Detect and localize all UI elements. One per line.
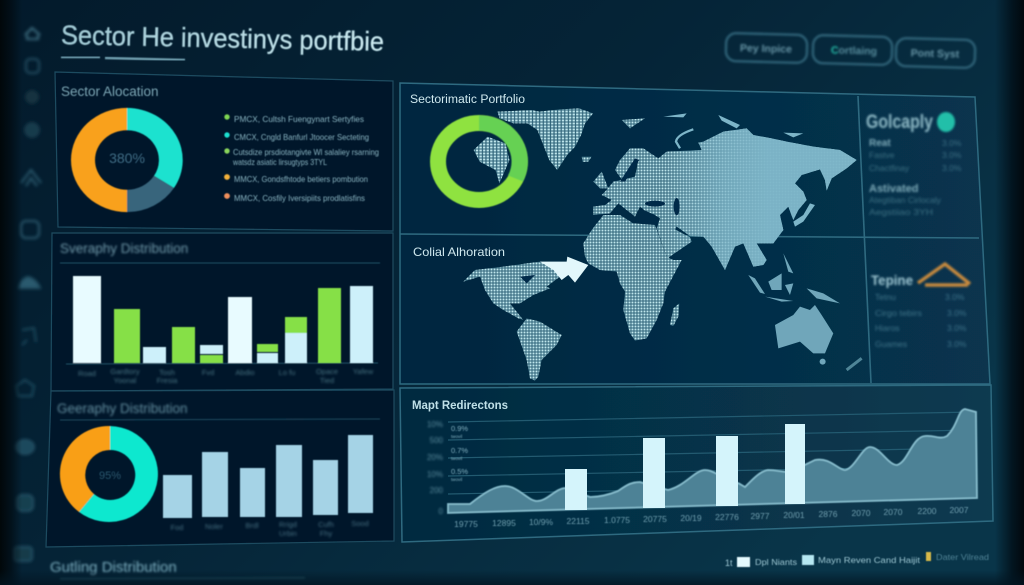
legend item 3 [224, 148, 379, 167]
axis labels: Yoonal [114, 376, 137, 385]
x axis labels: 20775 [643, 514, 667, 524]
heading: Mapt Redirectons [412, 398, 508, 412]
side panel: globally: Fastve [869, 150, 895, 160]
side panel: globally: Golcaply [866, 112, 933, 133]
bars [60, 263, 380, 364]
x axis labels: 22776 [715, 512, 739, 522]
side panel: topline: 3.0% [947, 323, 967, 333]
x axis labels: 10/9% [529, 517, 553, 527]
annotations: 0.7% [451, 446, 468, 455]
panel dividers [400, 96, 979, 383]
axis labels: Fresia [157, 376, 178, 385]
legend item 3: watsdz asiatic lirsugtyps 3TYL [232, 158, 327, 167]
side panel: globally: 3.0% [942, 138, 962, 148]
axis labels: Yafew [353, 367, 374, 376]
side panel: topline [871, 264, 970, 349]
legend item 3: Cutsdize prsdiotangivte Wl salaliey rsarning [233, 148, 379, 157]
icon: cloud [19, 277, 40, 288]
side panel: globally: Aegstiiao 3YH [869, 207, 933, 217]
map: africa [583, 215, 682, 341]
annotations: twovil [451, 456, 462, 461]
title underline [61, 57, 185, 60]
button: pay [726, 33, 807, 63]
heading: collal allocation: Colial Alhoration [413, 245, 505, 259]
x axis labels: 2876 [819, 509, 838, 519]
axis labels: Tied [320, 376, 334, 385]
map: arrow [540, 257, 588, 283]
axis labels: Noler [205, 522, 223, 531]
side panel: topline: Hiaros [875, 323, 900, 333]
footer legend: Mayn Reven Cand Haijit [818, 555, 921, 565]
axis labels: Urbin [279, 529, 297, 538]
map: greenland and islands [474, 108, 593, 183]
x axis labels: 19775 [454, 519, 478, 529]
map: uk [593, 172, 608, 188]
header buttons [726, 33, 975, 68]
axis labels: Brdl [245, 521, 259, 530]
y axis labels: 10% [427, 470, 443, 479]
icon: cloud two [16, 440, 34, 454]
footer legend [725, 552, 989, 568]
icon: profile [26, 59, 39, 73]
annotations [451, 424, 468, 482]
legend item 2: CMCX, Cngld Banfurl Jtoocer Secteting [234, 133, 369, 142]
y axis labels: 10% [427, 420, 443, 429]
side panel: topline: 3.0% [947, 308, 967, 318]
map: eurasia [582, 113, 857, 270]
icon: globe [25, 123, 39, 137]
icon: screen [21, 221, 39, 238]
map: madagascar [670, 303, 679, 326]
y axis labels: 0 [439, 507, 444, 516]
side panel: globally: Chactfinay [869, 163, 910, 173]
area series [448, 409, 977, 513]
icon: hexagon [16, 380, 34, 396]
map: pointer [847, 358, 862, 370]
status dot [937, 112, 955, 132]
y axis labels: 20% [427, 453, 443, 462]
map: svalbard [622, 118, 645, 128]
axis labels: Sood [351, 519, 369, 528]
donut chart [71, 108, 183, 212]
button: control: Cortlaing [831, 44, 877, 58]
heading: cutting distribution: Gutling Distribution [50, 559, 177, 576]
legend [224, 114, 379, 203]
map: tasmania [820, 359, 826, 365]
map: southern continents [463, 215, 862, 381]
x axis labels: 2070 [852, 508, 871, 518]
map: islands [748, 253, 840, 303]
annotations: twovil [451, 477, 462, 482]
side panel: globally [866, 112, 962, 217]
donut chart [60, 426, 158, 522]
button: pay: Pey Inpice [740, 42, 792, 56]
x axis labels: 1.0775 [604, 515, 630, 525]
axis labels: Fvd [202, 368, 214, 377]
panel: world map [400, 83, 990, 384]
axis labels: Fod [171, 523, 183, 532]
side panel: topline: Guames [875, 339, 907, 349]
footer legend: Dater Vilread [936, 552, 989, 562]
icon: circle [26, 91, 38, 103]
button: post: Pont Syst [911, 47, 960, 61]
axis labels: Opace [316, 367, 338, 376]
donut value: 95% [99, 470, 121, 482]
side panel: topline: Tepine [871, 272, 913, 288]
panel: market projections chart [400, 385, 993, 542]
footer legend: Dpl Niants [755, 557, 797, 567]
icon: tile [17, 495, 33, 511]
footer legend: 1t [725, 558, 733, 568]
map: australia [775, 305, 833, 353]
axis labels: Cufh [318, 520, 334, 529]
side panel: globally: Reat [869, 138, 891, 149]
y axis labels: 500 [430, 436, 444, 445]
x axis labels: 20/01 [783, 510, 805, 520]
axis labels: Road [78, 369, 96, 378]
side panel: globally: Ategtiban Cirlocaly [869, 195, 942, 205]
bars [565, 424, 805, 510]
map [463, 108, 862, 381]
y axis labels: 200 [430, 486, 444, 495]
legend item 1: PMCX, Cultsh Fuengynart Sertyfies [234, 115, 364, 124]
annotations: 0.9% [451, 424, 468, 433]
side panel: topline: 3.0% [945, 292, 965, 302]
green ring [438, 115, 528, 200]
axis labels: Lo fu [279, 368, 295, 377]
map: north america [463, 262, 560, 320]
map: arctic isles [663, 113, 803, 148]
x axis labels: 2200 [918, 506, 937, 516]
heading: Geeraphy Distribution [57, 401, 188, 416]
legend item 4: MMCX, Gondsfhtode betiers pombution [234, 175, 368, 184]
annotations: twovil [451, 434, 462, 439]
sidebar icons [14, 28, 41, 561]
x axis labels: 20/19 [680, 513, 702, 523]
x axis labels: 12895 [492, 518, 516, 528]
side panel: globally: 3.0% [942, 163, 962, 173]
panel: geography distribution [46, 390, 394, 547]
axis labels [78, 367, 374, 385]
panel: sector allocation [55, 72, 393, 231]
y axis labels [427, 420, 444, 516]
title: Sector He investinys portfbie [61, 20, 384, 57]
side panel: topline: Cirgo tebirs [875, 308, 922, 318]
x axis labels: 22115 [566, 516, 590, 526]
icon: network [21, 170, 41, 186]
side panel: globally: 3.0% [942, 150, 962, 160]
axis labels [171, 519, 369, 538]
x axis labels: 2977 [751, 511, 770, 521]
x axis labels [454, 505, 969, 529]
axis labels: Rrigd [279, 520, 297, 529]
heading: Sveraphy Distribution [60, 241, 188, 256]
icon: home [25, 28, 40, 39]
gridlines [448, 412, 975, 494]
map: iceland [582, 157, 592, 162]
heading: sector portfolio: Sectorimatic Portfolio [410, 94, 525, 106]
axis labels: Fhy [320, 529, 332, 538]
icon: folder [14, 547, 32, 561]
annotations: 0.5% [451, 467, 468, 476]
donut value: 380% [109, 150, 145, 166]
map: inland seas [620, 158, 680, 215]
heading: Sector Alocation [61, 84, 159, 99]
axis labels: Tosh [159, 368, 175, 377]
map: asia solid overlay [593, 128, 857, 270]
axis labels: Gardtory [110, 367, 140, 376]
axis labels: Abdio [235, 368, 255, 377]
button: post [896, 38, 975, 68]
x axis labels: 2007 [950, 505, 969, 515]
map: south america [517, 318, 562, 381]
x axis labels: 2070 [884, 507, 903, 517]
map: hudson bay [520, 275, 535, 283]
bars [60, 419, 380, 518]
panel: sector bar chart [51, 233, 393, 391]
side panel: topline: 3.0% [947, 339, 967, 349]
icon: roof [918, 264, 970, 285]
legend item 5: MMCX, Cosfily Iversipiits prodlatisfins [234, 194, 365, 203]
map: japan [793, 203, 815, 227]
side panel: globally: Astivated [869, 183, 919, 195]
side panel: topline: Tetnu [875, 292, 896, 302]
button: control [813, 35, 892, 65]
icon: nodes [22, 328, 36, 345]
